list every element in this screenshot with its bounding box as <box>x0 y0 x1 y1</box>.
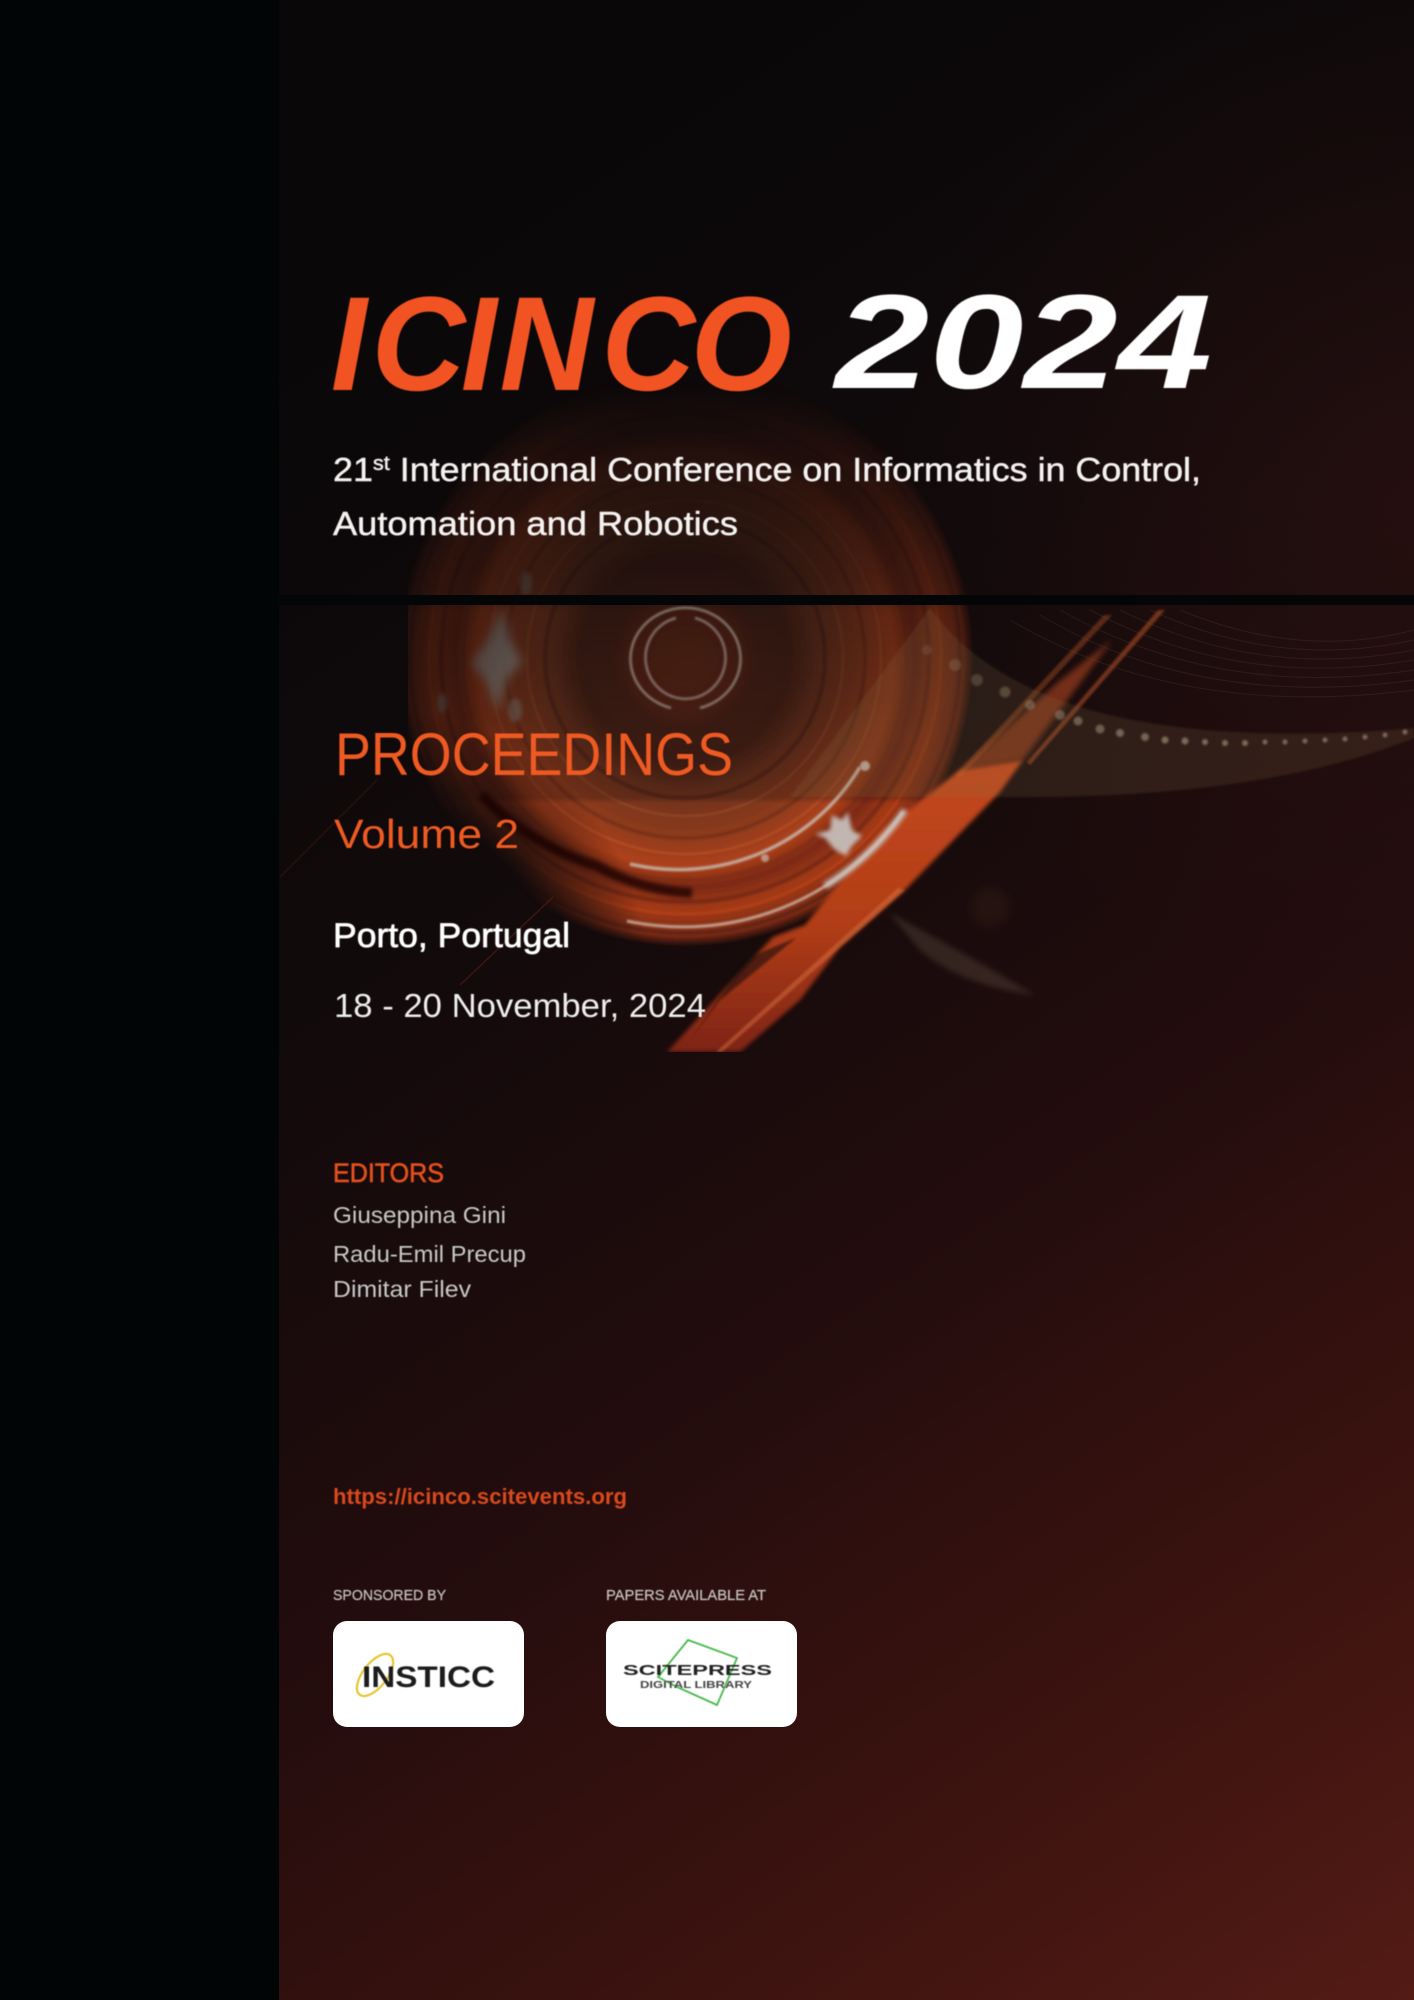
proceedings heading: PROCEEDINGS <box>335 721 733 788</box>
editors: EDITORS <box>333 1158 444 1188</box>
dotted trail <box>922 645 1408 746</box>
conference subtitle: 21 <box>333 451 370 488</box>
volume: Volume 2 <box>334 811 519 857</box>
thin red line <box>460 897 553 985</box>
fine curved lines <box>1010 610 1414 697</box>
grey streak on left of disc <box>472 608 522 712</box>
dark arc <box>482 795 692 893</box>
conference title: 2024 <box>831 268 1212 417</box>
logo: INSTICC: INSTICC <box>362 1661 495 1694</box>
sponsored by label: SPONSORED BY <box>333 1587 446 1604</box>
website url: https://icinco.scitevents.org <box>333 1484 627 1509</box>
editors: Radu-Emil Precup <box>333 1241 526 1267</box>
bright splash <box>815 812 862 856</box>
small ring <box>631 608 740 708</box>
thin red line far left <box>280 780 377 877</box>
horizontal black band <box>279 595 1414 605</box>
tan wisp <box>892 916 1028 994</box>
conference subtitle: International Conference on Informatics in Control, <box>390 451 1201 488</box>
conference title: ICINCO <box>331 269 792 418</box>
papers available label: PAPERS AVAILABLE AT <box>606 1587 766 1604</box>
swoosh <box>790 608 1414 797</box>
conference subtitle: Automation and Robotics <box>333 505 738 542</box>
location: Porto, Portugal <box>333 917 570 955</box>
conference title <box>331 268 1212 418</box>
left black strip <box>0 0 279 2000</box>
conference subtitle: st <box>373 453 390 475</box>
lens flare blob <box>976 894 1004 920</box>
editors: Giuseppina Gini <box>333 1202 506 1228</box>
concentric disc <box>397 370 973 946</box>
small grey flares <box>437 571 532 722</box>
dates: 18 - 20 November, 2024 <box>334 987 706 1024</box>
editors <box>333 1158 526 1302</box>
white arc outer <box>627 812 903 927</box>
editors: Dimitar Filev <box>333 1276 472 1302</box>
diagonal streak <box>667 760 1023 1052</box>
logo: SCITEPRESS digital library: SCITEPRESS <box>623 1662 772 1679</box>
conference subtitle <box>333 451 1201 542</box>
white arc inner <box>630 767 860 870</box>
logo: SCITEPRESS digital library: DIGITAL LIBRARY <box>640 1680 752 1691</box>
abstract circular lens artwork <box>280 370 1414 1052</box>
logo: SCITEPRESS digital library <box>606 1621 797 1727</box>
logo: INSTICC <box>333 1621 524 1727</box>
